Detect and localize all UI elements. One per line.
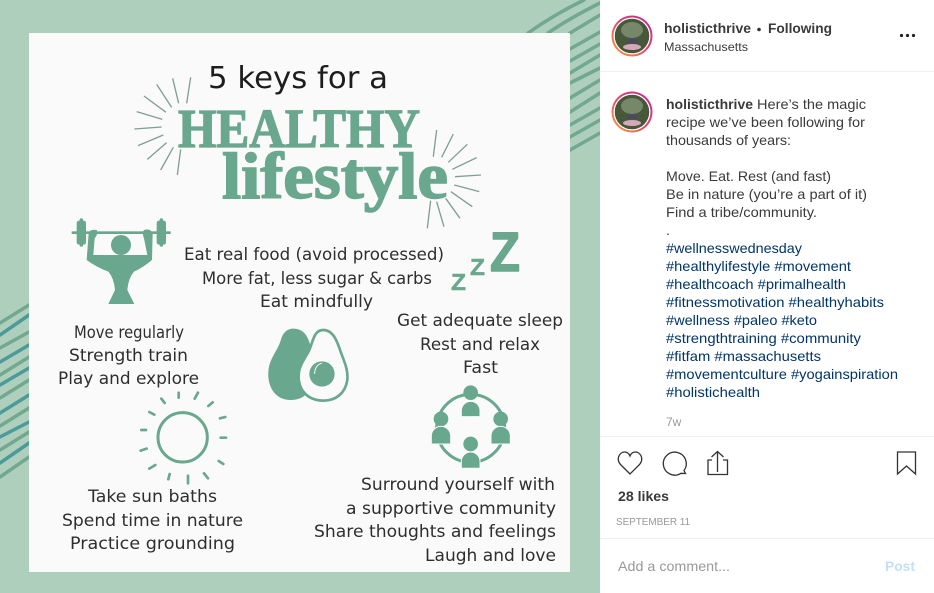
icon: sleep zzz bbox=[451, 220, 520, 295]
header account name bbox=[664, 20, 832, 54]
icon: more options bbox=[900, 34, 915, 37]
header account name: holisticthrive bbox=[664, 20, 751, 36]
post age: 7w bbox=[666, 415, 682, 429]
text block: movement: Strength train bbox=[69, 346, 188, 365]
text block: food: Eat real food (avoid processed) bbox=[184, 245, 444, 264]
hashtags: #healthcoach #primalhealth bbox=[666, 276, 846, 292]
icon: like bbox=[618, 452, 642, 474]
header avatar bbox=[612, 16, 652, 56]
title: lifestyle: lifestyle bbox=[222, 140, 448, 213]
text block: sleep: Rest and relax bbox=[420, 335, 540, 354]
caption text bbox=[666, 96, 867, 238]
header account name: Massachusetts bbox=[664, 40, 748, 54]
text block: food: More fat, less sugar & carbs bbox=[202, 269, 432, 288]
hashtags: #wellnesswednesday bbox=[666, 240, 802, 256]
date: SEPTEMBER 11 bbox=[616, 517, 690, 528]
text block: movement bbox=[58, 323, 199, 388]
header account name: Following bbox=[768, 20, 832, 36]
panel: infographic background bbox=[0, 0, 600, 593]
caption text: recipe we’ve been following for bbox=[666, 114, 865, 130]
icon: sleep zzz: Z bbox=[490, 220, 520, 283]
icon: community circle bbox=[431, 385, 510, 468]
hashtags: #strengthtraining #community bbox=[666, 330, 861, 346]
hashtags: #wellness #paleo #keto bbox=[666, 312, 817, 328]
panel: white poster card bbox=[29, 33, 570, 572]
text block: nature: Take sun baths bbox=[87, 487, 217, 506]
likes count: 28 likes bbox=[618, 488, 669, 504]
post button: Post bbox=[885, 558, 915, 574]
hashtags: #holistichealth bbox=[666, 384, 760, 400]
panel: post sidebar bbox=[600, 0, 934, 593]
title: HEALTHY: HEALTHY bbox=[178, 98, 420, 159]
text block: food: Eat mindfully bbox=[260, 292, 373, 311]
icon: share bbox=[708, 452, 728, 474]
icon: sun bbox=[141, 393, 226, 483]
caption text: Find a tribe/community. bbox=[666, 204, 817, 220]
text block: food bbox=[184, 245, 444, 311]
icon: avocado bbox=[268, 329, 347, 401]
text block: sleep: Fast bbox=[463, 358, 499, 377]
text block: movement: Play and explore bbox=[58, 369, 199, 388]
caption text: Be in nature (you’re a part of it) bbox=[666, 186, 867, 202]
text block: community bbox=[314, 475, 556, 565]
hashtags: #healthylifestyle #movement bbox=[666, 258, 851, 274]
caption text: Here’s the magic bbox=[757, 96, 866, 112]
icon: sleep zzz: Z bbox=[470, 254, 485, 280]
comment input: Add a comment... bbox=[618, 558, 730, 574]
text block: nature bbox=[62, 487, 243, 553]
hashtags: #fitfam #massachusetts bbox=[666, 348, 821, 364]
caption avatar bbox=[612, 92, 652, 132]
text block: movement: Move regularly bbox=[74, 323, 184, 342]
text block: community: Share thoughts and feelings bbox=[314, 522, 556, 541]
icon: bookmark bbox=[898, 452, 916, 474]
decorative sun rays around title bbox=[134, 77, 481, 228]
text block: sleep: Get adequate sleep bbox=[397, 311, 563, 330]
hashtags: #movementculture #yogainspiration bbox=[666, 366, 898, 382]
hashtags: #fitnessmotivation #healthyhabits bbox=[666, 294, 884, 310]
text block: community: a supportive community bbox=[346, 499, 556, 518]
icon: sleep zzz: Z bbox=[451, 269, 466, 295]
text block: nature: Spend time in nature bbox=[62, 511, 243, 530]
icon: weightlifter bbox=[72, 218, 171, 304]
text block: community: Surround yourself with bbox=[361, 475, 555, 494]
text block: sleep bbox=[397, 311, 563, 377]
icon: comment bbox=[663, 452, 686, 475]
text block: community: Laugh and love bbox=[425, 546, 556, 565]
caption text: holisticthrive bbox=[666, 96, 753, 112]
text block: nature: Practice grounding bbox=[70, 534, 235, 553]
caption text: Move. Eat. Rest (and fast) bbox=[666, 168, 831, 184]
caption text: thousands of years: bbox=[666, 132, 791, 148]
caption text: . bbox=[666, 222, 670, 238]
title: 5 keys for a: 5 keys for a bbox=[208, 61, 388, 96]
hashtags bbox=[666, 240, 898, 400]
